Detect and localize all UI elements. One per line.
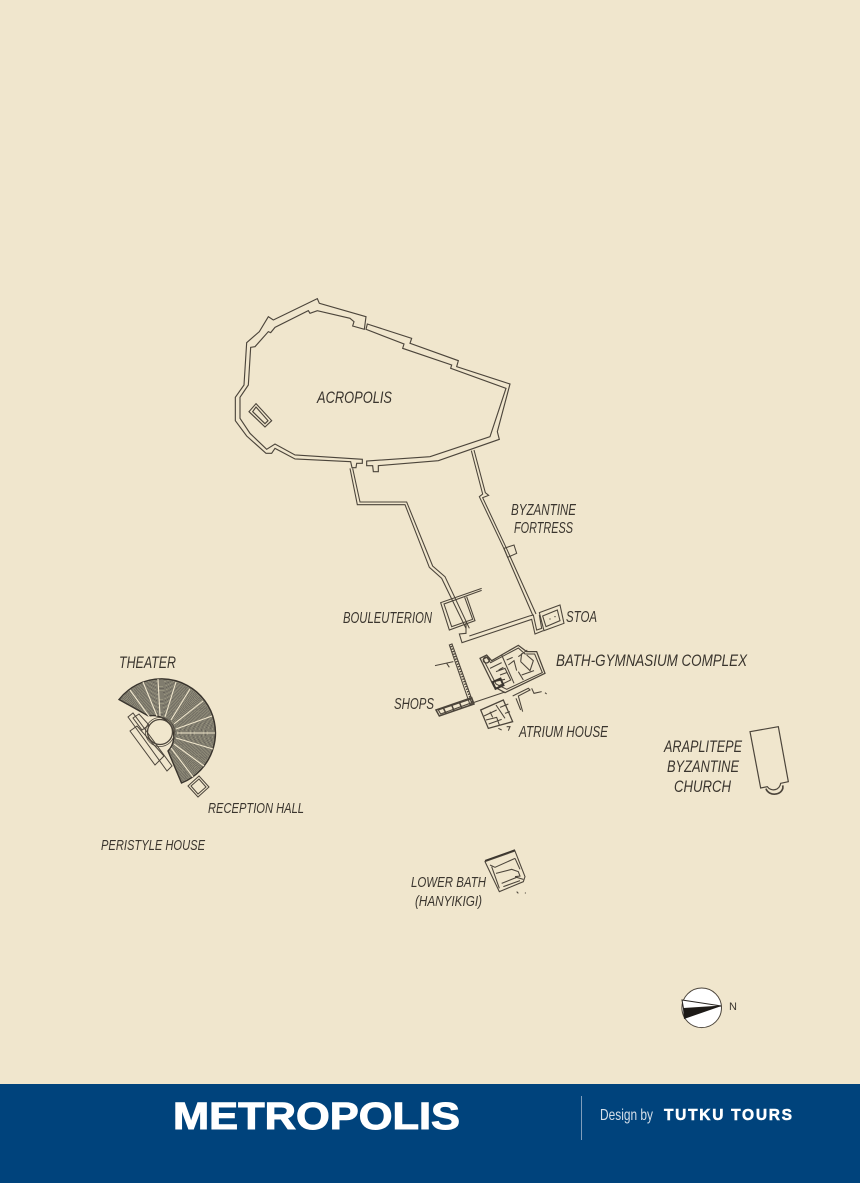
label: lower bath: LOWER BATH (411, 874, 486, 891)
colonnade (449, 644, 473, 705)
plan: acropolis walls (235, 299, 510, 472)
connecting wall (473, 692, 505, 703)
church apse (766, 785, 783, 794)
acropolis west wall (235, 299, 366, 468)
label: bath-gymnasium complex: BATH-GYMNASIUM COMPLEX (556, 651, 748, 670)
icon: north compass (682, 988, 737, 1028)
label: byzantine fortress: BYZANTINE (511, 502, 576, 519)
label: atrium house: ATRIUM HOUSE (518, 724, 608, 741)
label: stoa: STOA (566, 609, 597, 626)
label: acropolis: ACROPOLIS (316, 388, 392, 407)
lower bath building (485, 850, 526, 893)
label: byzantine fortress (511, 502, 576, 537)
plan: byzantine fortress walls (350, 450, 564, 643)
fortress west wall (350, 468, 466, 628)
acropolis small building (249, 404, 272, 427)
shops (436, 698, 474, 716)
reception hall building (188, 776, 209, 797)
acropolis east wall (366, 324, 510, 472)
label: shops: SHOPS (394, 696, 434, 713)
icon: north compass: N (729, 1001, 737, 1013)
fortress east wall (471, 451, 533, 615)
label: lower bath (411, 874, 486, 910)
atrium house (481, 700, 513, 731)
theater orchestra ring (148, 720, 172, 744)
fortress south wall and towers (459, 619, 543, 643)
plan: araplitepe church (750, 727, 788, 794)
plan: lower bath (485, 850, 526, 893)
title: METROPOLIS (173, 1096, 460, 1138)
main bath building (480, 645, 545, 693)
label: araplitepe byzantine church: CHURCH (674, 777, 732, 796)
plan: bath-gymnasium complex, shops and atrium house (435, 644, 547, 731)
small structures (513, 688, 547, 712)
theater aisles (130, 679, 215, 777)
footer banner (0, 1084, 860, 1183)
plan: theater (119, 679, 215, 797)
brand name: TUTKU TOURS (664, 1107, 792, 1124)
divider (581, 1096, 582, 1140)
label: bouleuterion: BOULEUTERION (343, 610, 433, 627)
label: byzantine fortress: FORTRESS (514, 520, 573, 537)
label: araplitepe byzantine church: ARAPLITEPE (663, 737, 742, 756)
label: reception hall: RECEPTION HALL (208, 800, 304, 817)
bouleuterion (441, 588, 482, 630)
theater seating fan (119, 679, 215, 783)
label: araplitepe byzantine church (663, 737, 742, 796)
label: lower bath: (HANYIKIGI) (415, 893, 482, 910)
label: araplitepe byzantine church: BYZANTINE (667, 757, 739, 776)
theater stage building (128, 713, 172, 771)
label: peristyle house: PERISTYLE HOUSE (101, 837, 206, 854)
label: theater: THEATER (119, 653, 176, 672)
church outline (750, 727, 788, 790)
design credit: Design by (600, 1107, 653, 1124)
